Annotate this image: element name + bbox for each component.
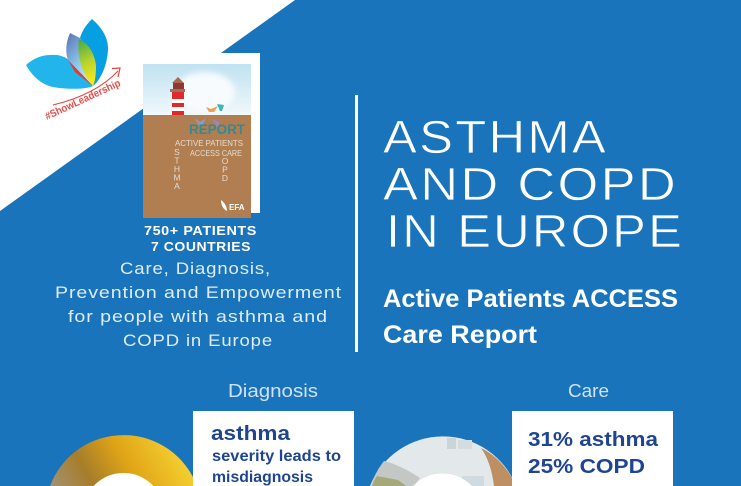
cover title: REPORT [189, 122, 246, 137]
title: ASTHMA [383, 111, 608, 163]
title: IN EUROPE [386, 205, 684, 257]
logo: ShowLeadership butterfly [26, 19, 123, 123]
description [55, 259, 342, 350]
panel: diagnosis [50, 381, 354, 486]
cover subtitle: T [174, 156, 180, 166]
description: for people with asthma and [68, 307, 328, 326]
cover subtitle: D [222, 173, 228, 183]
title [383, 111, 684, 257]
white diagonal corner [0, 0, 295, 211]
title: AND COPD [383, 158, 678, 210]
icon: lighthouse [170, 77, 185, 115]
care heading: Care [568, 381, 609, 401]
cover subtitle: O [222, 156, 229, 166]
subtitle [383, 285, 678, 349]
care callout [512, 411, 673, 486]
cover subtitle [173, 138, 243, 191]
diagnosis callout: severity leads to [212, 448, 341, 465]
image ring: gold circle [50, 435, 197, 486]
cover subtitle: ACTIVE PATIENTS [175, 138, 243, 148]
description: Prevention and Empowerment [55, 283, 342, 302]
cover subtitle: S [174, 147, 180, 157]
patient count: 750+ PATIENTS [144, 224, 257, 238]
cover subtitle: H [174, 164, 180, 174]
subtitle: Care Report [383, 321, 538, 349]
panel: care [370, 381, 673, 486]
description: COPD in Europe [123, 331, 273, 350]
cover subtitle: M [173, 172, 181, 182]
cover subtitle: P [222, 164, 228, 174]
cover subtitle: ACCESS CARE [190, 148, 242, 158]
care callout: 25% COPD [528, 455, 645, 478]
cover EFA logo: EFA [229, 203, 245, 212]
logo hashtag: #ShowLeadership [43, 77, 123, 123]
care callout: 31% asthma [528, 428, 659, 451]
left intro text [55, 224, 342, 350]
cover subtitle: A [174, 181, 180, 191]
subtitle: Active Patients ACCESS [383, 285, 678, 313]
diagnosis callout: asthma [211, 423, 291, 445]
country count: 7 COUNTRIES [151, 240, 251, 254]
diagnosis heading: Diagnosis [228, 381, 318, 401]
diagnosis callout [193, 411, 354, 486]
icon: birds [194, 104, 224, 128]
vertical divider [355, 95, 358, 352]
report cover with white backing [143, 53, 260, 218]
diagnosis callout: misdiagnosis [212, 469, 313, 486]
image ring: photo circle [370, 436, 516, 486]
description: Care, Diagnosis, [120, 259, 271, 278]
